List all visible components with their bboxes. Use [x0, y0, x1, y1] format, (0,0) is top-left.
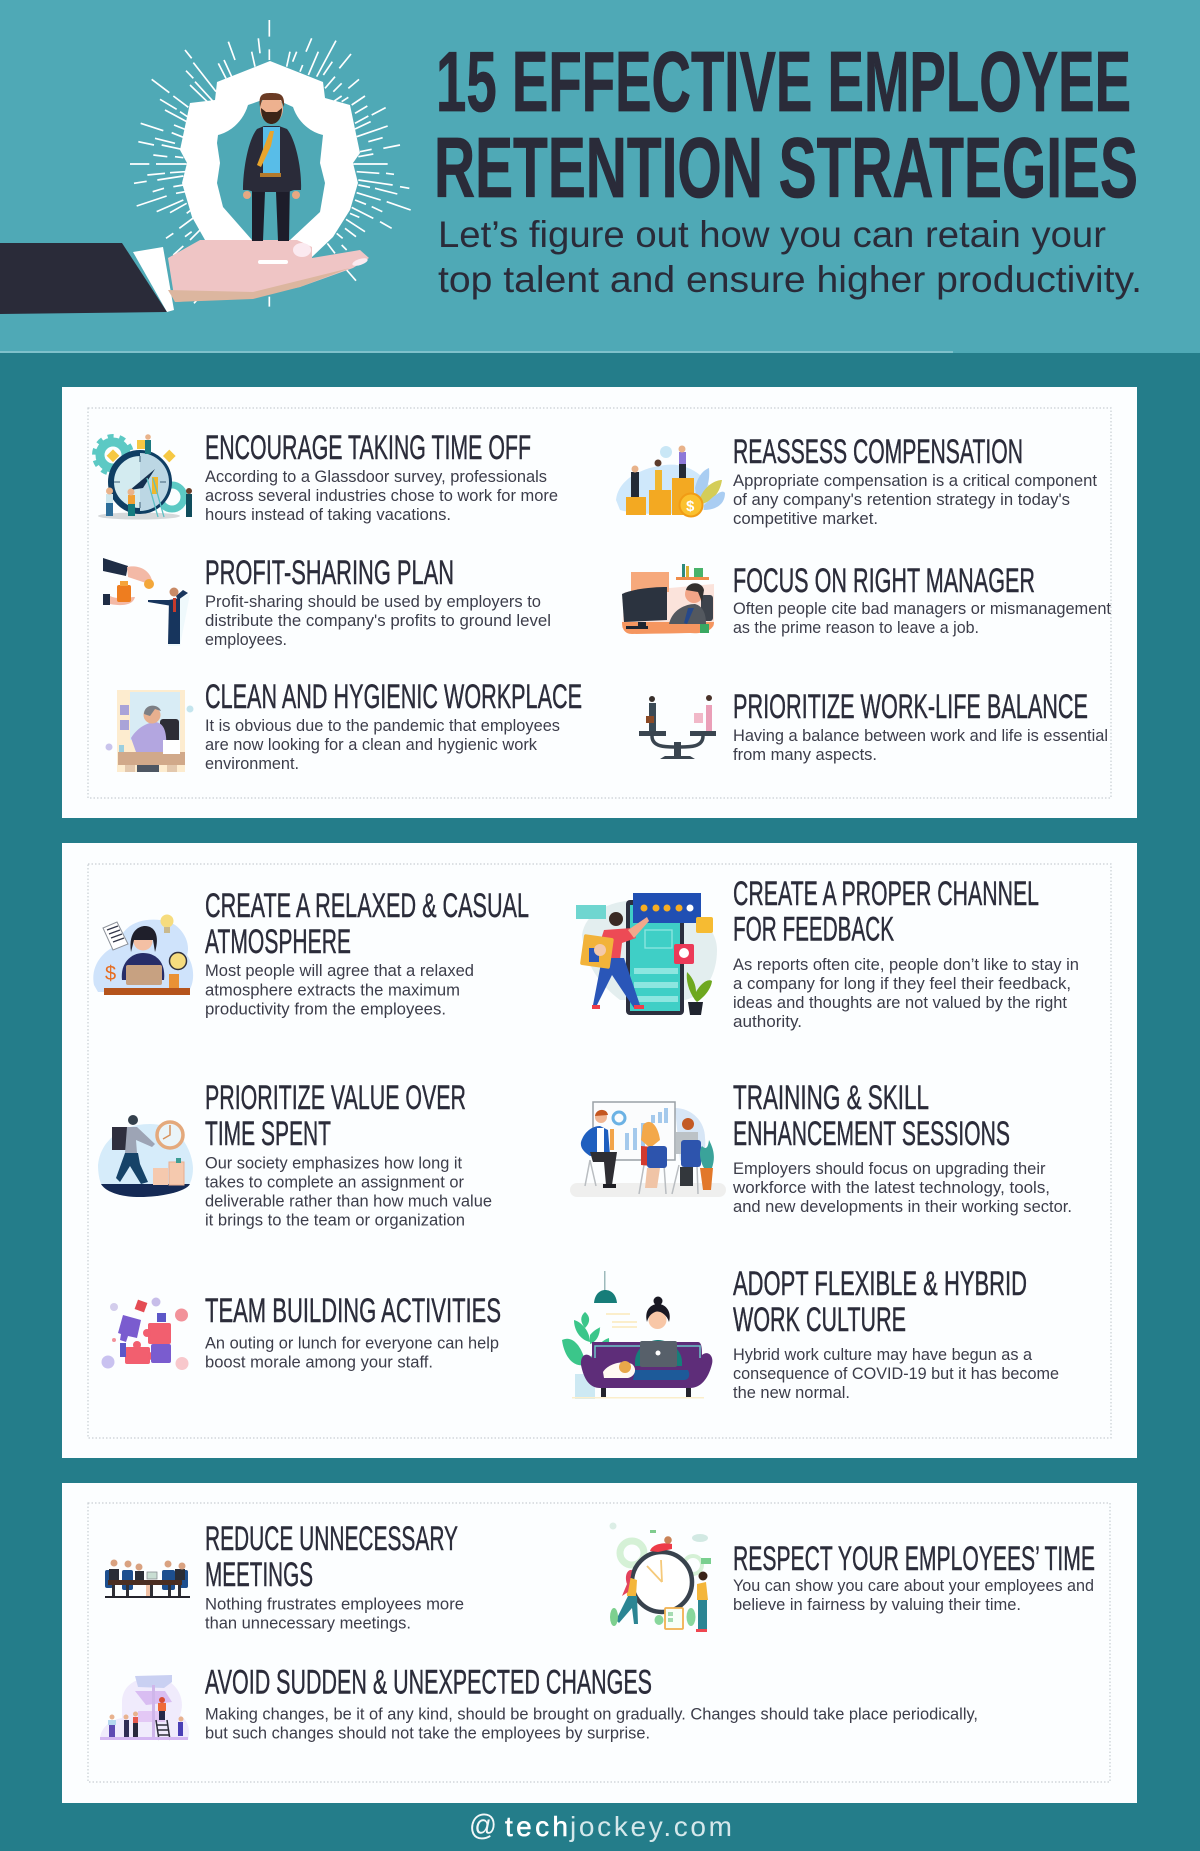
icon: woman at laptop: $	[105, 963, 116, 985]
text block	[733, 1577, 1094, 1614]
heading	[733, 875, 1039, 948]
footer: website address: @	[469, 1809, 497, 1842]
text block	[733, 727, 1108, 764]
icon: manager at monitor	[622, 564, 714, 634]
icon: people with ladder and signposts	[100, 1675, 189, 1740]
icon: puzzle pieces	[102, 1298, 188, 1370]
text block: Hybrid work culture may have begun as a	[733, 1346, 1033, 1364]
text block: Nothing frustrates employees more	[205, 1596, 464, 1614]
item: reduce unnecessary meetings	[105, 1520, 464, 1632]
item: clean and hygienic workplace	[106, 678, 582, 773]
heading	[733, 1079, 1010, 1153]
text block: from many aspects.	[733, 746, 877, 764]
heading: TRAINING & SKILL	[733, 1079, 929, 1117]
heading: CREATE A RELAXED & CASUAL	[205, 887, 529, 925]
item: focus on right manager	[622, 562, 1111, 637]
text block: It is obvious due to the pandemic that employees	[205, 717, 560, 735]
item: team building activities	[102, 1292, 501, 1372]
text block: Profit-sharing should be used by employers to	[205, 593, 541, 611]
heading: REDUCE UNNECESSARY	[205, 1520, 458, 1558]
text block: deliverable rather than how much value	[205, 1192, 492, 1210]
panel: section three	[62, 1483, 1137, 1803]
text block	[733, 956, 1079, 1031]
item: avoid sudden and unexpected changes	[100, 1664, 978, 1742]
heading: ATMOSPHERE	[205, 923, 351, 961]
item: proper channel for feedback	[576, 875, 1079, 1031]
text block: boost morale among your staff.	[205, 1354, 433, 1372]
text block: authority.	[733, 1013, 802, 1031]
text block	[205, 962, 474, 1018]
text block: Having a balance between work and life is essential	[733, 727, 1108, 745]
heading: ENCOURAGE TAKING TIME OFF	[205, 429, 531, 467]
text block: workforce with the latest technology, tools,	[732, 1179, 1050, 1197]
item: flexible and hybrid work culture	[562, 1265, 1059, 1402]
icon: team around table	[105, 1560, 190, 1598]
illustration: hand holding employee in burst	[0, 20, 411, 314]
text block	[205, 1706, 978, 1742]
text block: of any company's retention strategy in today's	[733, 491, 1070, 509]
text block: You can show you care about your employees and	[733, 1577, 1094, 1595]
subtitle: top talent and ensure higher productivity.	[438, 259, 1142, 300]
heading: WORK CULTURE	[733, 1301, 906, 1339]
header band	[0, 0, 1200, 353]
text block: are now looking for a clean and hygienic work	[205, 736, 538, 754]
heading	[205, 1520, 458, 1594]
text block: competitive market.	[733, 510, 878, 528]
heading	[205, 887, 529, 961]
title	[434, 35, 1138, 216]
text block	[733, 600, 1111, 637]
text block: environment.	[205, 755, 299, 773]
item: respect your employees' time	[610, 1522, 1095, 1632]
icon: woman on sofa with laptop	[562, 1271, 712, 1399]
subtitle	[438, 214, 1142, 300]
text block: Appropriate compensation is a critical component	[733, 472, 1097, 490]
footer: website address	[469, 1809, 732, 1842]
text block: than unnecessary meetings.	[205, 1614, 411, 1632]
text block	[205, 1596, 464, 1632]
icon: hands and coins	[103, 558, 190, 646]
text block	[205, 1154, 492, 1230]
heading: AVOID SUDDEN & UNEXPECTED CHANGES	[205, 1664, 652, 1702]
text block	[205, 1334, 499, 1372]
icon: coin stacks	[616, 446, 725, 516]
text block: Often people cite bad managers or mismanagement	[733, 600, 1111, 618]
text block: employees.	[205, 631, 287, 649]
heading: PROFIT-SHARING PLAN	[205, 554, 454, 592]
text block: it brings to the team or organization	[205, 1212, 465, 1230]
text block	[205, 717, 560, 773]
text block: believe in fairness by valuing their time.	[733, 1596, 1021, 1614]
text block: An outing or lunch for everyone can help	[205, 1334, 499, 1352]
panel: section one	[62, 387, 1137, 818]
text block: Our society emphasizes how long it	[205, 1154, 462, 1172]
heading: TEAM BUILDING ACTIVITIES	[205, 1292, 501, 1330]
heading: TIME SPENT	[205, 1115, 331, 1153]
heading	[733, 1265, 1027, 1339]
panel: section two	[62, 843, 1137, 1458]
text block: and new developments in their working sector.	[733, 1198, 1072, 1216]
item: prioritize work-life balance	[639, 688, 1108, 764]
heading: ENHANCEMENT SESSIONS	[733, 1115, 1010, 1153]
text block: Most people will agree that a relaxed	[205, 962, 474, 980]
text block	[205, 468, 558, 524]
item: prioritize value over time spent	[98, 1079, 492, 1230]
heading	[205, 1079, 466, 1153]
text block: the new normal.	[733, 1384, 850, 1402]
icon: coin stacks: $	[686, 498, 695, 515]
icon: presentation meeting	[570, 1102, 726, 1197]
text block: but such changes should not take the employees by surprise.	[205, 1724, 650, 1742]
icon: woman at laptop	[93, 914, 193, 995]
text block: atmosphere extracts the maximum	[205, 982, 460, 1000]
icon: balance scale	[639, 695, 716, 759]
text block: ideas and thoughts are not valued by the right	[733, 994, 1067, 1012]
footer: website address: tech	[505, 1811, 568, 1842]
text block: productivity from the employees.	[205, 1000, 446, 1018]
footer: website address: jockey.com	[569, 1811, 732, 1842]
icon: clock with three people	[610, 1522, 711, 1632]
heading: MEETINGS	[205, 1556, 313, 1594]
text block: across several industries chose to work for more	[205, 487, 558, 505]
item: relaxed and casual atmosphere	[93, 887, 529, 1018]
heading: FOR FEEDBACK	[733, 910, 894, 948]
item: reassess compensation	[616, 433, 1097, 528]
text block: a company for long if they feel their feedback,	[733, 975, 1071, 993]
text block	[733, 1346, 1059, 1402]
heading: REASSESS COMPENSATION	[733, 433, 1023, 471]
text block: According to a Glassdoor survey, professionals	[205, 468, 547, 486]
text block	[205, 593, 551, 649]
text block: Employers should focus on upgrading their	[733, 1160, 1046, 1178]
item: profit-sharing plan	[103, 554, 551, 649]
text block: As reports often cite, people don’t like to stay in	[733, 956, 1079, 974]
icon: man pushing clock	[98, 1115, 193, 1197]
heading: PRIORITIZE VALUE OVER	[205, 1079, 466, 1117]
subtitle: Let’s figure out how you can retain your	[438, 214, 1106, 255]
text block: Making changes, be it of any kind, should be brought on gradually. Changes should take place periodically,	[205, 1706, 978, 1724]
heading: CLEAN AND HYGIENIC WORKPLACE	[205, 678, 582, 716]
text block: consequence of COVID-19 but it has become	[733, 1365, 1059, 1383]
text block: takes to complete an assignment or	[205, 1174, 465, 1192]
heading: ADOPT FLEXIBLE & HYBRID	[733, 1265, 1027, 1303]
text block: as the prime reason to leave a job.	[733, 619, 979, 637]
text block: hours instead of taking vacations.	[205, 506, 451, 524]
text block	[733, 472, 1097, 528]
item: encourage taking time off	[94, 429, 558, 524]
item: training and skill sessions	[570, 1079, 1072, 1216]
icon: man with phone and rating	[576, 893, 717, 1015]
text block	[732, 1160, 1072, 1216]
text block: distribute the company's profits to ground level	[205, 612, 551, 630]
icon: clock with workers	[94, 434, 192, 520]
icon: person sanitising at desk	[106, 690, 194, 772]
